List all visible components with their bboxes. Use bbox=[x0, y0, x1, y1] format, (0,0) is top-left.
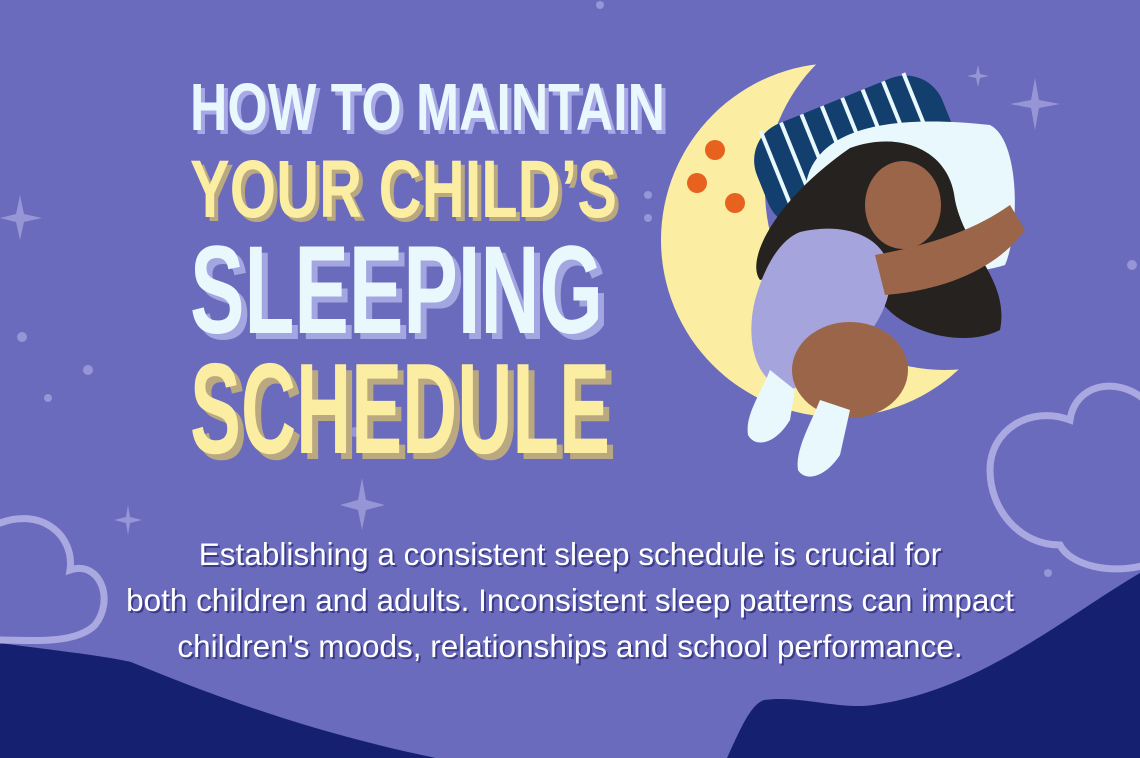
illustration: girl sleeping on moon bbox=[661, 64, 1025, 477]
title bbox=[190, 70, 669, 470]
moon bbox=[661, 64, 959, 416]
socks bbox=[748, 370, 795, 443]
pillow white bbox=[805, 121, 1015, 272]
hair bbox=[756, 141, 1001, 338]
arm bbox=[875, 205, 1025, 295]
face bbox=[865, 161, 941, 249]
thigh bbox=[792, 322, 908, 418]
paragraph: Establishing a consistent sleep schedule is crucial for bbox=[199, 536, 941, 572]
paragraph: children's moods, relationships and school performance. bbox=[177, 628, 963, 664]
paragraph bbox=[126, 536, 1016, 666]
pillow striped bbox=[742, 63, 969, 240]
dress bbox=[751, 229, 890, 390]
paragraph: both children and adults. Inconsistent sleep patterns can impact bbox=[126, 582, 1014, 618]
